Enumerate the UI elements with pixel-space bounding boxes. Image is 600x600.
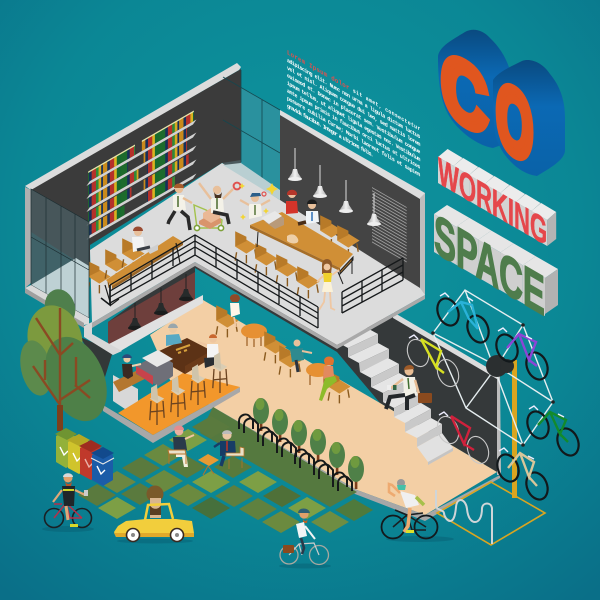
- bin green: [55, 428, 77, 468]
- man at laptop: [132, 226, 158, 254]
- barista: [122, 354, 141, 379]
- bike red: [433, 412, 493, 467]
- cyclist left: [42, 473, 94, 532]
- panel: upper floor slab: [90, 163, 425, 349]
- long meeting table and chairs: [235, 212, 360, 298]
- title: CO: O: [496, 61, 533, 185]
- bar shelf: [107, 295, 203, 353]
- title: CO: [438, 30, 565, 185]
- cyclist center with satchel: [279, 508, 331, 568]
- bar stools: [150, 352, 227, 425]
- pendant lamps black: [128, 274, 193, 330]
- bartender: [166, 324, 182, 346]
- woman in yellow dress: [317, 259, 339, 310]
- woman reading: [230, 294, 240, 327]
- bin red: [79, 440, 102, 480]
- block of lorem ipsum text: adipiscing elit. Nunc non urna a ligula dictum luctus: [287, 57, 421, 141]
- title: WORKING: [438, 149, 556, 255]
- title: SPACE: [434, 201, 558, 328]
- block of lorem ipsum text: euismod et. Donec in placerat sem. Vestibulum congue: [287, 72, 421, 156]
- bike green: [523, 406, 583, 459]
- block of lorem ipsum text: ipsum tellus, ut aliquet ligula egestas nec. Vestibulum: [287, 79, 421, 164]
- seated team at meeting table: [234, 183, 319, 224]
- bin blue: [91, 447, 114, 486]
- bike parking frame: [436, 360, 545, 545]
- panel: ground floor walls: [80, 262, 501, 475]
- bike racks: [239, 414, 352, 491]
- railings: [101, 235, 403, 328]
- front floor edge: [213, 407, 500, 521]
- title: CO: C: [441, 32, 488, 157]
- panel: ground floor sand: [150, 300, 497, 515]
- panel: cafe bar: [103, 324, 240, 443]
- small trees: [253, 398, 364, 489]
- big tree: [16, 286, 118, 431]
- outdoor table with two men: [168, 426, 244, 475]
- block of lorem ipsum text: [287, 49, 421, 186]
- recycling bins: [55, 428, 114, 486]
- woman in green: [319, 356, 337, 401]
- man on laptop: [290, 340, 312, 372]
- left desk with chairs: [88, 226, 183, 305]
- bookshelf: [86, 109, 196, 240]
- block of lorem ipsum text: gravida faucibus. Integer a ultrices felis.: [287, 102, 374, 159]
- staircase: [337, 328, 453, 465]
- bike beige: [493, 448, 552, 503]
- block of lorem ipsum text: ante ipsum primis in faucibus orci luctus et ultrices: [287, 87, 421, 171]
- block of lorem ipsum text: posuere cubilia Curae; Morbi laoreet felis et sapien: [287, 95, 421, 179]
- chalkboard text: [372, 187, 407, 263]
- runner with trolley and books: [168, 183, 233, 231]
- panel: upper floor back walls: [25, 63, 425, 295]
- yellow car with driver: [114, 486, 194, 544]
- bike purple: [492, 328, 552, 383]
- bin yellow: [67, 434, 90, 474]
- title: SPACE: SPACE: [434, 201, 545, 328]
- customer: [198, 334, 220, 368]
- panel: paving tiles and lawn: [78, 407, 373, 533]
- pendant lamps silver: [288, 148, 381, 226]
- title: WORKING: WORKING: [438, 150, 547, 255]
- left glass wall: [25, 187, 122, 355]
- man on stairs with briefcase: [386, 365, 432, 410]
- bike yellow: [403, 335, 463, 390]
- cafe tables and seated people: [216, 294, 351, 403]
- block of lorem ipsum text: Lorem Ipsum dolor sit amet, consectetur: [287, 49, 420, 133]
- cyclist right with helmet: [382, 479, 454, 542]
- bike cyan: [433, 293, 493, 346]
- block of lorem ipsum text: vel et nisl. Aliquam congue dui leo, sed mattis lorem: [287, 64, 421, 148]
- bike wall frame structure: [431, 290, 555, 447]
